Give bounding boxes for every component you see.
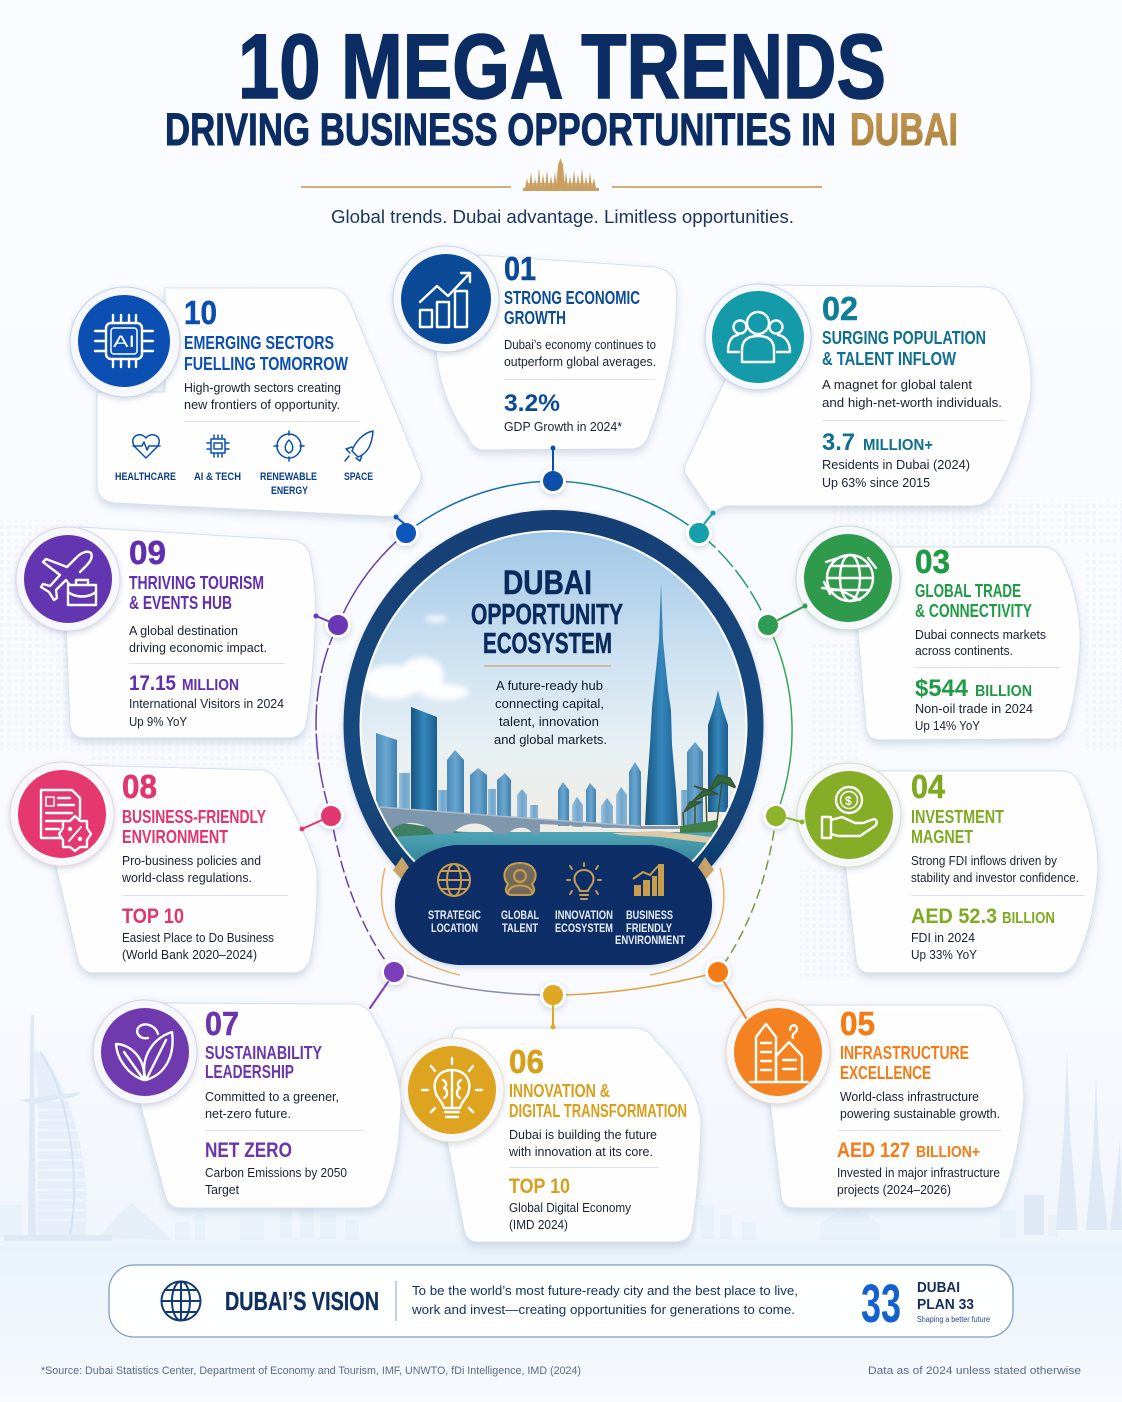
description: A global destination [129, 624, 238, 638]
vision statement: work and invest—creating opportunities for generations to come. [411, 1302, 795, 1317]
description: Dubai is building the future [509, 1128, 657, 1142]
palm trees [680, 775, 736, 833]
icon: leaves [93, 1000, 197, 1104]
central hub [344, 510, 764, 965]
description: Dubai connects markets [915, 628, 1046, 642]
icon: people [705, 284, 811, 390]
panel: 02 population [684, 284, 1031, 513]
sector labels: AI & TECH [194, 471, 241, 483]
statistic label: projects (2024–2026) [837, 1183, 951, 1197]
statistic label: (IMD 2024) [509, 1218, 568, 1232]
heading [822, 327, 986, 369]
description [504, 338, 656, 369]
heading [504, 287, 640, 328]
statistic [911, 905, 1055, 928]
tall towers [411, 583, 728, 825]
description: outperform global averages. [504, 355, 656, 369]
heading: & TALENT INFLOW [822, 348, 956, 369]
heading: STRONG ECONOMIC [504, 287, 640, 308]
statistic: 3.2% [504, 390, 560, 417]
description: A magnet for global talent [822, 378, 973, 392]
heading [122, 806, 266, 847]
description [840, 1090, 1000, 1121]
panel: 09 tourism [16, 527, 316, 738]
navy ring [344, 510, 764, 940]
hub description: connecting capital, [495, 696, 604, 711]
heading: GROWTH [504, 307, 566, 328]
Dubai Plan 33 logo: DUBAI [917, 1280, 960, 1296]
icon: brain bulb [400, 1038, 504, 1142]
icon: AI chip [70, 287, 180, 397]
description [184, 381, 341, 412]
icon: globe [438, 864, 470, 896]
pillar labels [428, 908, 686, 947]
description: Dubai’s economy continues to [504, 338, 656, 352]
description: stability and investor confidence. [911, 871, 1079, 885]
heading: ENVIRONMENT [122, 826, 229, 847]
description [508, 1128, 657, 1159]
panel: 10 emerging sectors [70, 287, 421, 517]
footer data note: Data as of 2024 unless stated otherwise [868, 1365, 1081, 1377]
description: driving economic impact. [129, 641, 267, 655]
statistic label: GDP Growth in 2024* [504, 420, 622, 434]
headline: 10 MEGA TRENDS [238, 16, 886, 118]
vision heading: DUBAI’S VISION [225, 1286, 379, 1316]
statistic label [822, 458, 970, 490]
statistic label: Up 63% since 2015 [822, 476, 930, 490]
number: 03 [915, 543, 950, 580]
description: net-zero future. [205, 1107, 291, 1121]
vision banner [109, 1265, 1013, 1337]
icon: innovation bulb [567, 863, 601, 899]
statistic label: Up 9% YoY [129, 715, 188, 729]
white inner rim [360, 530, 748, 922]
pillar labels: INNOVATION [555, 908, 613, 922]
statistic label: Invested in major infrastructure [837, 1166, 1000, 1180]
icon: globe and plane [796, 526, 900, 630]
heading: GLOBAL TRADE [915, 580, 1021, 601]
statistic label [911, 931, 978, 962]
statistic label: Easiest Place to Do Business [122, 931, 274, 945]
description: and high-net-worth individuals. [822, 396, 1002, 410]
statistic: AED 52.3 [911, 905, 997, 928]
sector labels: RENEWABLE [260, 471, 317, 483]
heading: BUSINESS-FRIENDLY [122, 806, 266, 827]
number: 06 [509, 1043, 544, 1080]
background skyline: Burj Al Arab and towers [0, 1015, 1122, 1241]
statistic: 17.15 [129, 672, 176, 695]
number: 04 [911, 768, 946, 805]
statistic: $544 [915, 675, 969, 702]
heading: INNOVATION & [509, 1080, 610, 1101]
statistic: MILLION+ [863, 437, 933, 454]
statistic label: Target [205, 1183, 240, 1197]
statistic label: Carbon Emissions by 2050 [205, 1166, 347, 1180]
dotted world map background [0, 500, 1122, 980]
statistic label: Up 14% YoY [915, 719, 981, 733]
heading: EXCELLENCE [840, 1062, 931, 1083]
gold divider with skyline [301, 158, 822, 191]
description [129, 624, 267, 655]
heading: EMERGING SECTORS [184, 332, 334, 353]
heading [840, 1042, 969, 1083]
description [911, 854, 1079, 885]
hub heading: DUBAI [503, 564, 592, 602]
heading: SUSTAINABILITY [205, 1042, 322, 1063]
panel: 01 economic growth [393, 246, 676, 450]
heading [911, 806, 1005, 847]
statistic label [122, 931, 274, 962]
panel: 08 business friendly [10, 762, 317, 973]
hub heading: OPPORTUNITY [471, 599, 623, 631]
heading: INVESTMENT [911, 806, 1005, 827]
hub description: and global markets. [494, 732, 607, 747]
title [165, 16, 958, 155]
statistic label: Up 33% YoY [911, 948, 978, 962]
statistic label: FDI in 2024 [911, 931, 975, 945]
description: Pro-business policies and [122, 854, 261, 868]
panel: 07 sustainability [93, 1000, 401, 1208]
heading: & CONNECTIVITY [915, 600, 1032, 621]
heading: LEADERSHIP [205, 1061, 294, 1082]
sector labels [115, 471, 373, 497]
statistic label: Non-oil trade in 2024 [915, 702, 1033, 716]
Dubai Plan 33 logo: Shaping a better future [917, 1315, 990, 1324]
icon: growth chart [393, 246, 499, 352]
hub heading [471, 564, 623, 660]
statistic: TOP 10 [122, 905, 184, 928]
statistic label [129, 697, 284, 729]
bridge [378, 807, 730, 838]
pillars banner [395, 845, 712, 965]
heading: & EVENTS HUB [129, 592, 232, 613]
statistic: BILLION [1002, 910, 1055, 927]
icon: city buildings [726, 1000, 830, 1104]
connector lines [302, 448, 805, 1027]
number: 01 [504, 250, 536, 287]
heading: DIGITAL TRANSFORMATION [509, 1100, 687, 1121]
description: across continents. [915, 644, 1013, 658]
hub description: talent, innovation [499, 714, 599, 729]
sector labels: HEALTHCARE [115, 471, 176, 483]
Dubai Plan 33 logo: 33 [861, 1274, 901, 1334]
statistic: TOP 10 [509, 1175, 570, 1198]
heading: FUELLING TOMORROW [184, 353, 348, 374]
statistic label: Residents in Dubai (2024) [822, 458, 970, 472]
icon: growth bars [633, 864, 664, 896]
description: powering sustainable growth. [840, 1107, 1000, 1121]
statistic: MILLION [182, 677, 239, 694]
icon: AI chip: AI [113, 332, 135, 351]
tagline: Global trends. Dubai advantage. Limitless opportunities. [331, 207, 794, 227]
description: world-class regulations. [121, 871, 252, 885]
Dubai skyline photo [362, 532, 746, 861]
heading [184, 332, 348, 374]
pillar labels: TALENT [502, 921, 539, 935]
vision statement [411, 1283, 798, 1317]
panel: 05 infrastructure [726, 1000, 1024, 1208]
panel: 06 innovation [400, 1028, 701, 1242]
statistic: 3.7 [822, 429, 855, 456]
pillar labels: LOCATION [431, 921, 478, 935]
icon: vision globe [162, 1281, 200, 1321]
pillar labels: FRIENDLY [626, 921, 672, 935]
orbit nodes and connectors [300, 446, 808, 1030]
panel: 03 global trade [796, 526, 1080, 740]
heading: THRIVING TOURISM [129, 572, 264, 593]
hub description: A future-ready hub [496, 678, 603, 693]
number: 08 [122, 768, 157, 805]
sector labels: SPACE [344, 471, 373, 483]
hub description [494, 678, 607, 747]
heading: MAGNET [911, 826, 974, 847]
icon: money hand [797, 763, 901, 867]
pillar labels: ENVIRONMENT [615, 933, 686, 947]
description [121, 854, 261, 885]
statistic label [837, 1166, 1000, 1197]
pillar labels: STRATEGIC [428, 908, 481, 922]
heading [915, 580, 1032, 621]
number: 07 [205, 1005, 239, 1042]
description: Strong FDI inflows driven by [911, 854, 1058, 868]
icon: money hand: $ [845, 794, 852, 808]
statistic label [509, 1201, 632, 1232]
description: new frontiers of opportunity. [184, 398, 340, 412]
statistic label [205, 1166, 347, 1197]
statistic [837, 1139, 980, 1162]
statistic [822, 429, 933, 456]
icon: talent [504, 863, 536, 895]
footer source note: *Source: Dubai Statistics Center, Department of Economy and Tourism, IMF, UNWTO, fDi Intelligence, IMD (2024) [41, 1365, 581, 1377]
highlighted word: DUBAI [850, 104, 958, 155]
vision statement: To be the world’s most future-ready city and the best place to live, [412, 1283, 798, 1298]
subheadline: DRIVING BUSINESS OPPORTUNITIES IN [165, 104, 836, 155]
statistic [915, 675, 1032, 702]
connector dots [300, 446, 808, 1030]
description [205, 1090, 339, 1121]
statistic [129, 672, 239, 695]
icon: document percent [10, 762, 114, 866]
description: High-growth sectors creating [184, 381, 341, 395]
pillar labels: GLOBAL [501, 908, 539, 922]
orbit ring [316, 481, 792, 995]
heading: SURGING POPULATION [822, 327, 986, 348]
icon: plane and briefcase [16, 527, 120, 631]
statistic: NET ZERO [205, 1139, 292, 1162]
pillar labels: ECOSYSTEM [555, 921, 613, 935]
number: 05 [840, 1005, 875, 1042]
heading [509, 1080, 687, 1121]
description: with innovation at its core. [508, 1145, 653, 1159]
sector labels: ENERGY [271, 485, 309, 497]
description: Committed to a greener, [205, 1090, 339, 1104]
heading [205, 1042, 322, 1082]
panel: 04 investment magnet [797, 763, 1098, 973]
statistic label [915, 702, 1033, 733]
statistic: AED 127 [837, 1139, 910, 1162]
description [822, 378, 1002, 410]
statistic label: (World Bank 2020–2024) [122, 948, 257, 962]
shore [612, 831, 711, 843]
statistic: BILLION+ [916, 1144, 980, 1161]
number: 10 [184, 294, 217, 331]
heading [129, 572, 264, 613]
number: 09 [129, 534, 166, 571]
statistic: BILLION [975, 683, 1032, 700]
gold ring clasps [393, 857, 714, 880]
sector icons [133, 431, 373, 461]
hub heading: ECOSYSTEM [483, 628, 612, 660]
pillar labels: BUSINESS [626, 908, 673, 922]
Dubai Plan 33 logo: PLAN 33 [917, 1297, 974, 1313]
water [392, 832, 714, 861]
statistic label: Global Digital Economy [509, 1201, 632, 1215]
description: World-class infrastructure [840, 1090, 979, 1104]
number: 02 [822, 290, 858, 327]
heading: INFRASTRUCTURE [840, 1042, 969, 1063]
statistic label: International Visitors in 2024 [129, 697, 284, 711]
Dubai Plan 33 logo [861, 1274, 990, 1334]
description [915, 628, 1046, 658]
